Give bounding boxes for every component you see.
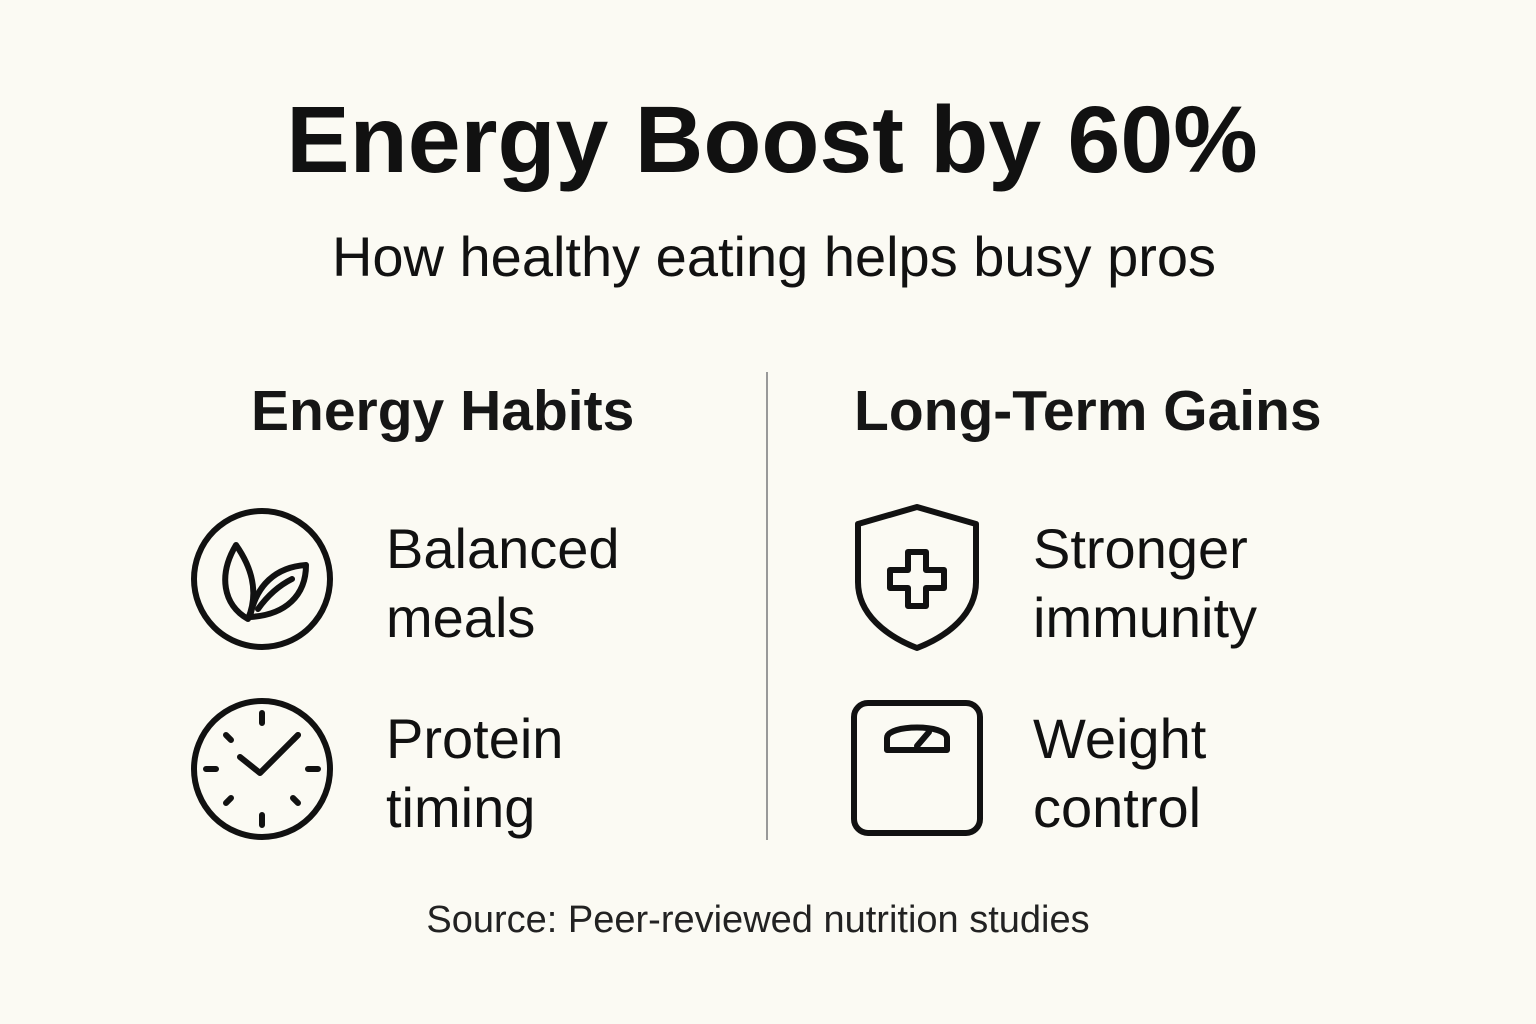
source: Source: Peer-reviewed nutrition studies <box>426 899 1090 941</box>
text: Balanced meals: Balanced <box>386 517 620 580</box>
text: Stronger immunity <box>1033 517 1257 649</box>
text: Protein timing: timing <box>386 776 535 839</box>
icon: scale <box>851 700 983 836</box>
title: Energy Boost by 60% <box>286 87 1258 193</box>
text: Weight control <box>1033 707 1206 839</box>
divider <box>766 372 768 840</box>
heading: Energy Habits: Energy Habits <box>251 379 634 443</box>
text: Stronger immunity: Stronger <box>1033 517 1248 580</box>
text: Protein timing: Protein <box>386 707 563 770</box>
icon: leaf <box>191 508 333 650</box>
text: Stronger immunity: immunity <box>1033 586 1257 649</box>
text: Balanced meals <box>386 517 620 649</box>
heading: Long-Term Gains: Long-Term Gains <box>854 379 1322 443</box>
text: Protein timing <box>386 707 563 839</box>
subtitle: How healthy eating helps busy pros <box>332 225 1216 288</box>
icon: clock <box>191 698 333 840</box>
text: Weight control: Weight <box>1033 707 1206 770</box>
icon: shield <box>855 504 979 651</box>
text: Weight control: control <box>1033 776 1201 839</box>
text: Balanced meals: meals <box>386 586 535 649</box>
